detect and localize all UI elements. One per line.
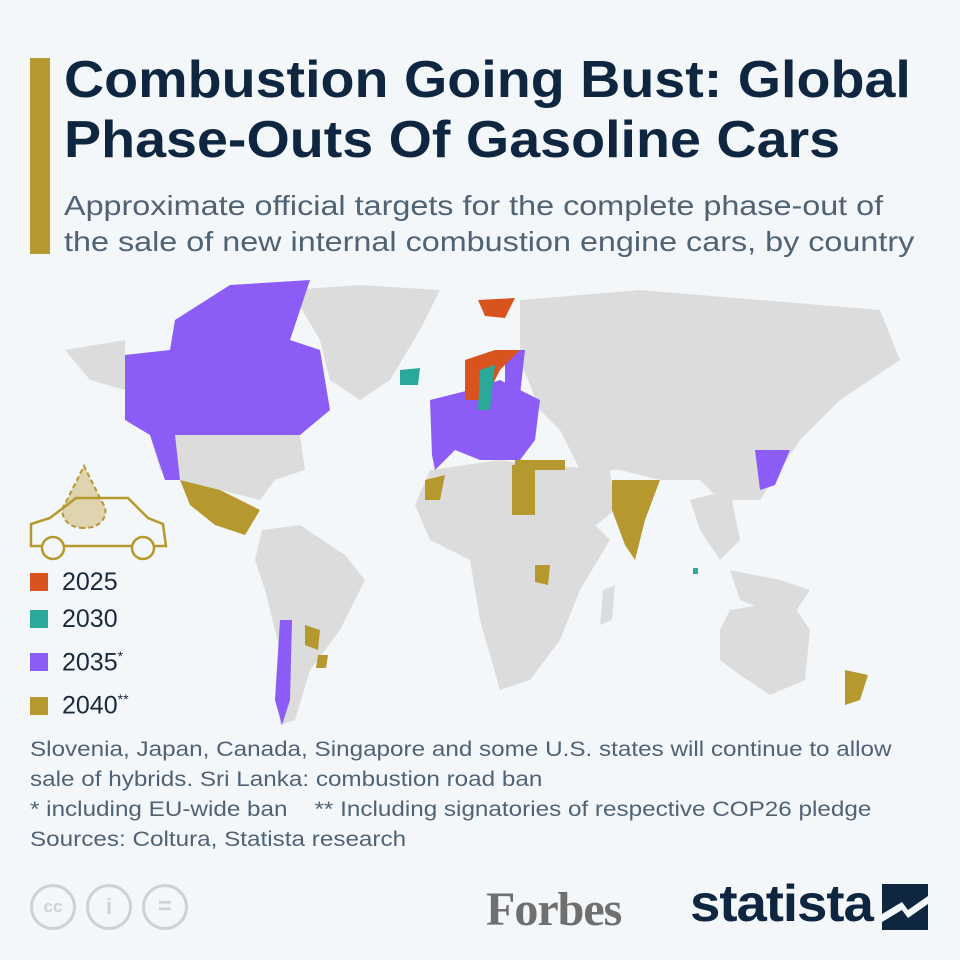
title: Combustion Going Bust: Global — [64, 51, 911, 109]
logo: statista: statista — [690, 875, 873, 933]
legend: 2040** — [62, 691, 129, 720]
world map — [65, 280, 900, 725]
legend: 2025 — [62, 568, 118, 596]
icons: licence: i — [106, 894, 112, 919]
footnotes: sale of hybrids. Sri Lanka: combustion road ban — [30, 768, 542, 791]
legend: 2030 — [62, 605, 118, 633]
logo: Forbes: Forbes — [486, 883, 621, 936]
icons: licence: = — [158, 893, 172, 920]
legend: 2035* — [62, 648, 123, 676]
title: Phase-Outs Of Gasoline Cars — [64, 111, 840, 169]
icons: licence — [30, 884, 188, 930]
title — [64, 51, 911, 169]
icon: car with fuel drop — [30, 464, 168, 560]
subtitle — [64, 190, 914, 257]
footnotes: * including EU-wide ban ** Including signatories of respective COP26 pledge — [30, 798, 871, 821]
subtitle: the sale of new internal combustion engine cars, by country — [64, 226, 914, 257]
footnotes: Slovenia, Japan, Canada, Singapore and some U.S. states will continue to allow — [30, 738, 892, 761]
accent bar — [30, 58, 50, 254]
legend — [30, 568, 129, 720]
footnotes: Sources: Coltura, Statista research — [30, 828, 406, 851]
icons: licence: cc — [44, 897, 62, 916]
subtitle: Approximate official targets for the complete phase-out of — [64, 190, 883, 221]
footnotes — [30, 738, 892, 851]
